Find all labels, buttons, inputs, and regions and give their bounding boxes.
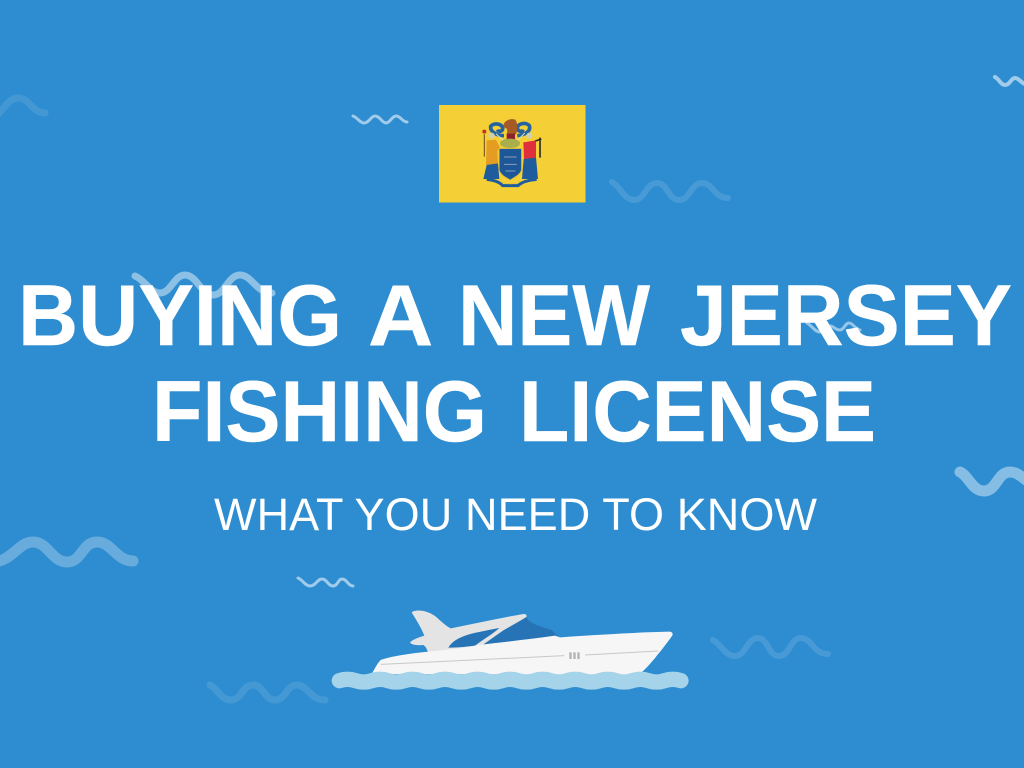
- motto ribbon: [487, 179, 537, 186]
- vents: [569, 652, 580, 659]
- horse head: [503, 119, 517, 134]
- coat of arms: [482, 119, 541, 186]
- windshield: [482, 617, 558, 646]
- scrollwork: [491, 123, 530, 136]
- hull stripe: [381, 651, 658, 664]
- icon: yacht on water: [339, 611, 681, 682]
- left figure: orange: [489, 133, 495, 139]
- subtitle: WHAT YOU NEED TO KNOW: [214, 489, 818, 540]
- title line 2: FISHING: [152, 364, 487, 460]
- right figure: red: [526, 133, 532, 139]
- shield: [499, 148, 522, 180]
- title: [18, 268, 1012, 460]
- water: [339, 679, 681, 682]
- title line 2: LICENSE: [519, 364, 876, 460]
- title line 1: NEW: [458, 268, 651, 364]
- flybridge fin: [410, 611, 527, 653]
- flag field: [439, 105, 586, 202]
- helmet: [500, 139, 520, 148]
- hull: [372, 632, 673, 675]
- flag of New Jersey: [439, 105, 586, 202]
- title line 1: BUYING: [18, 268, 342, 364]
- cabin: [410, 611, 558, 653]
- title line 1: A: [368, 268, 431, 364]
- title line 1: JERSEY: [680, 268, 1012, 364]
- side window: [448, 628, 499, 648]
